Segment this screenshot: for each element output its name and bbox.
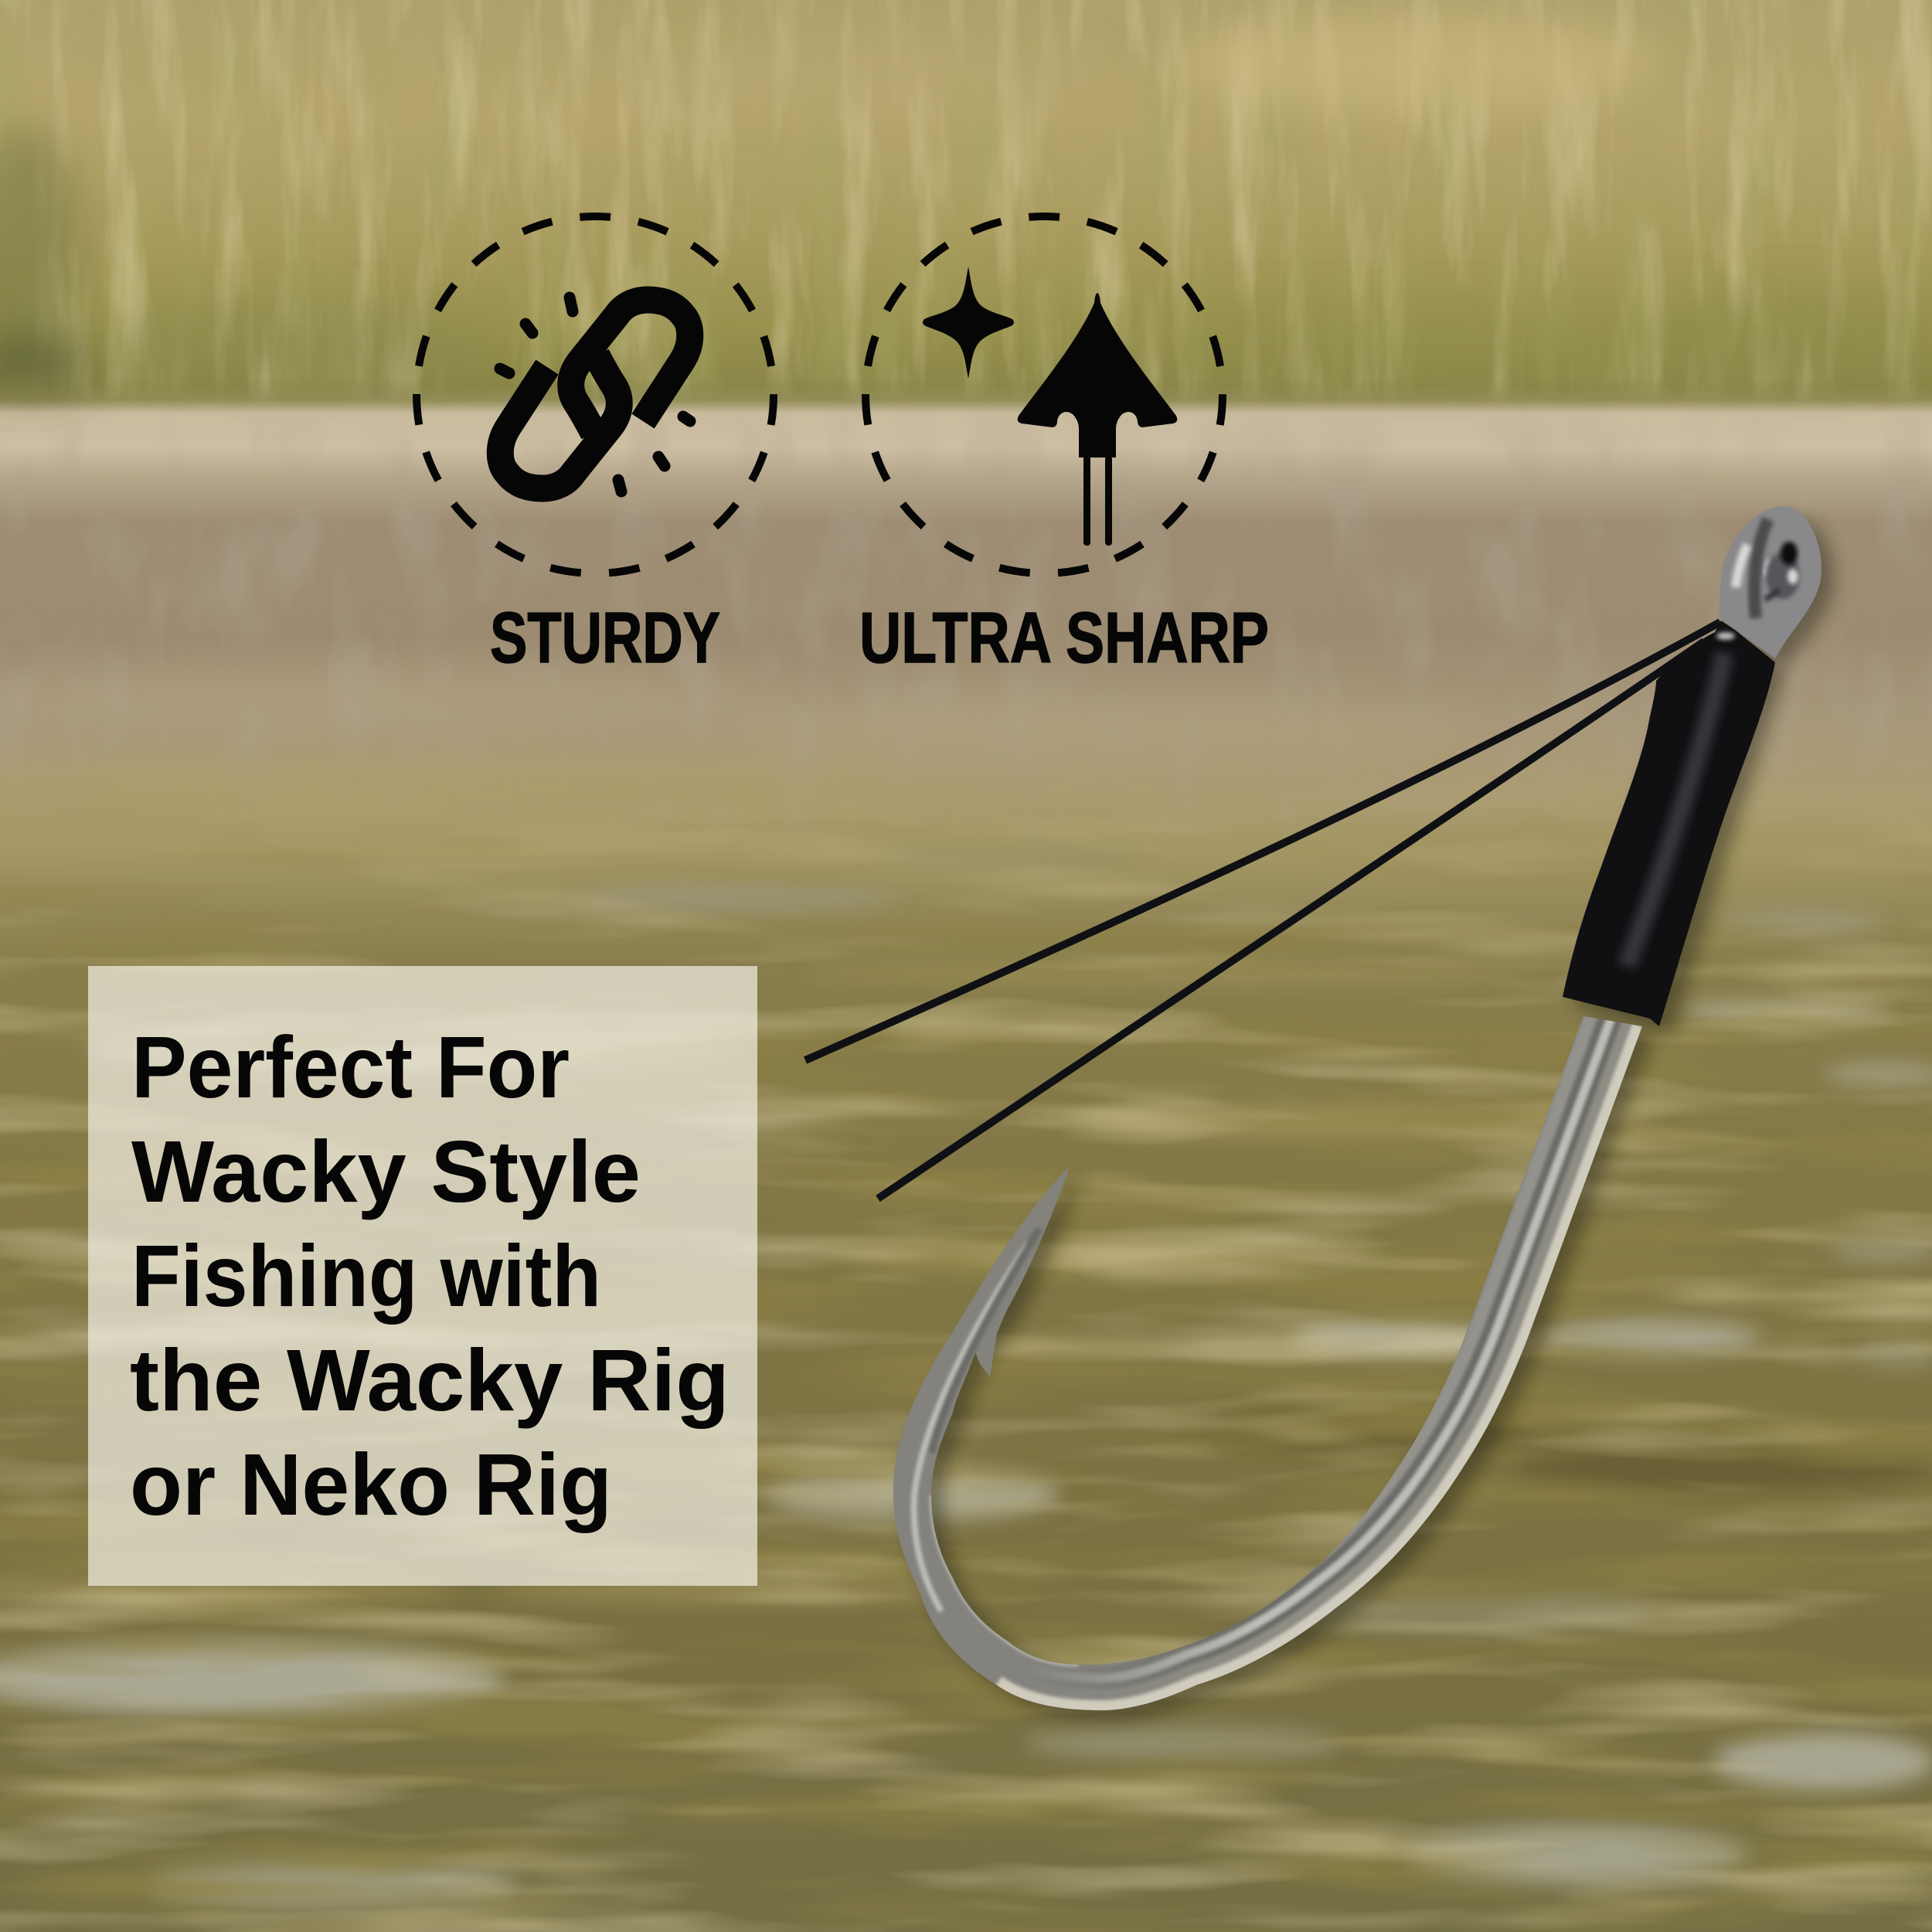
callout text: the Wacky Rig bbox=[130, 1332, 730, 1429]
icon: chain links bbox=[500, 300, 690, 488]
wire weed guard upper bbox=[805, 622, 1720, 1060]
panel: wacky rig callout bbox=[88, 966, 757, 1586]
icon: arrowhead with double shaft bbox=[1018, 293, 1177, 546]
label: STURDY: STURDY bbox=[490, 597, 720, 678]
callout text bbox=[130, 1019, 730, 1533]
hook eye bbox=[1719, 506, 1821, 658]
callout text: Wacky Style bbox=[131, 1123, 641, 1220]
hook wire metal body bbox=[881, 1005, 1654, 1723]
callout text: or Neko Rig bbox=[130, 1436, 612, 1533]
icon: chain spark ticks bbox=[500, 298, 690, 492]
callout text: Perfect For bbox=[131, 1019, 570, 1116]
icon: ultra sharp arrowhead in dashed circle bbox=[866, 216, 1223, 573]
icon: dashed circle ultra sharp bbox=[866, 216, 1223, 573]
heat shrink tube bbox=[1563, 621, 1775, 1026]
callout text: Fishing with bbox=[131, 1227, 601, 1325]
hook shadow bbox=[906, 515, 1834, 1719]
icon: dashed circle sturdy bbox=[417, 216, 774, 573]
wire weed guard lower bbox=[878, 641, 1704, 1199]
label: ULTRA SHARP: ULTRA SHARP bbox=[859, 597, 1269, 678]
hook: wacky weedless hook bbox=[805, 506, 1834, 1723]
icon: sturdy chain link in dashed circle bbox=[417, 216, 774, 573]
icon: sparkle star bbox=[923, 267, 1014, 379]
